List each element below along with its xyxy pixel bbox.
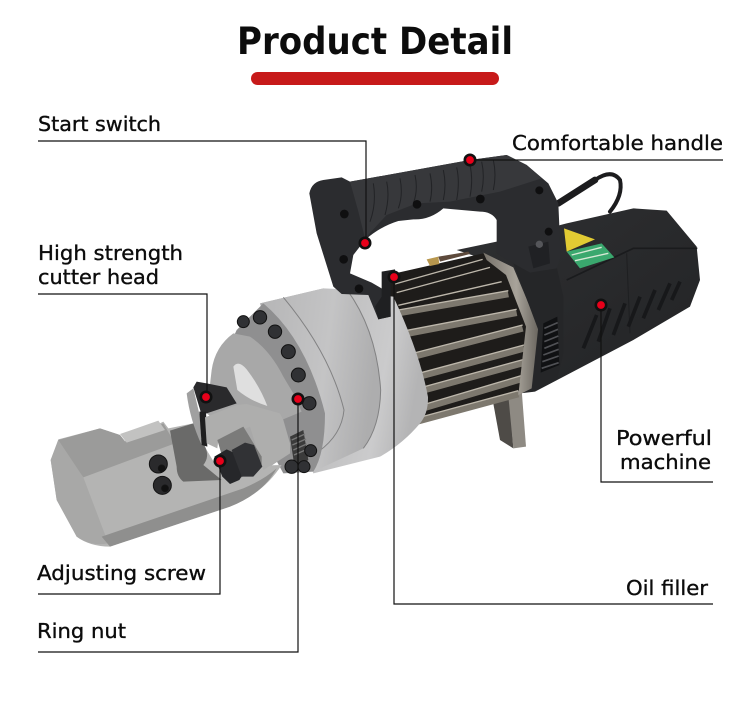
threaded rod	[290, 430, 308, 470]
motor front collar	[513, 263, 563, 392]
title: Product Detail	[237, 20, 513, 63]
label: high strength cutter head: High strength	[38, 241, 183, 265]
handle mounting screw	[528, 241, 550, 268]
marker dots	[201, 155, 606, 466]
label: powerful machine: Powerful	[616, 426, 712, 450]
tan collar ring	[483, 253, 538, 395]
label: oil filler: Oil filler	[626, 576, 709, 600]
moving block	[205, 404, 290, 470]
power cord	[558, 174, 621, 212]
handle	[309, 155, 561, 319]
flange front face	[217, 303, 325, 473]
support stand	[493, 390, 526, 448]
oil filler cap	[427, 252, 470, 266]
label: ring nut: Ring nut	[37, 619, 126, 643]
label: high strength cutter head: cutter head	[38, 265, 159, 289]
label: start switch: Start switch	[38, 112, 161, 136]
lower cutter body	[51, 421, 282, 547]
handle bracket	[375, 269, 396, 319]
rear section: cord, stand, motor, fins	[383, 174, 700, 448]
product photo: hydraulic rebar cutter	[51, 155, 700, 547]
motor housing	[457, 208, 700, 393]
label: adjusting screw: Adjusting screw	[37, 561, 206, 585]
title underline bar	[251, 72, 499, 85]
silver main cylinder	[260, 288, 428, 473]
leader lines	[38, 141, 723, 652]
warning labels	[564, 228, 614, 268]
cutter yoke	[207, 333, 302, 467]
silver flange	[260, 288, 381, 472]
flange bolts	[237, 311, 317, 473]
yoke bore	[233, 364, 267, 406]
label: comfortable handle: Comfortable handle	[512, 131, 723, 155]
side screws	[149, 455, 171, 494]
cooling fins	[383, 253, 535, 427]
vent slots	[541, 317, 559, 373]
label: high strength cutter head	[38, 241, 183, 289]
front section: cylinder and cutter head	[51, 288, 428, 547]
jaw recess	[170, 423, 222, 482]
adjusting nuts	[214, 443, 262, 484]
label: powerful machine	[616, 426, 712, 474]
label: powerful machine: machine	[620, 450, 711, 474]
upper die block	[187, 382, 237, 447]
